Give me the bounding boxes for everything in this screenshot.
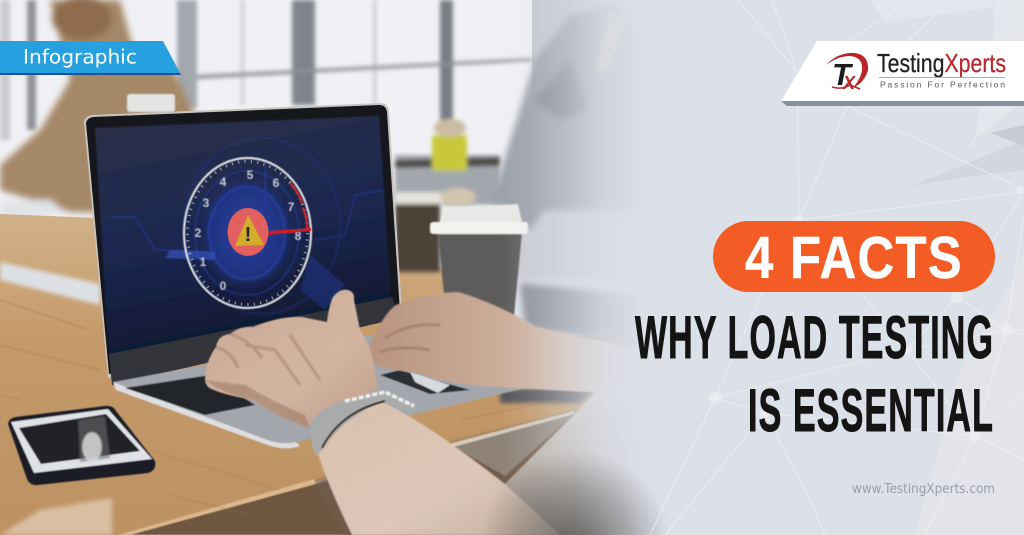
icon: warning triangle [235, 215, 264, 246]
gauge: numbers: 0 [220, 279, 227, 293]
logo mark: TX [826, 53, 868, 93]
gauge: numbers [195, 168, 302, 293]
photo: forearm [318, 402, 560, 535]
gauge: numbers: 1 [200, 255, 207, 269]
background network pattern [650, 0, 1024, 535]
logo wordmark: TestingXperts [877, 48, 1006, 78]
gauge: numbers: 5 [247, 168, 254, 182]
laptop lid and screen [84, 103, 402, 385]
gauge: needle [268, 228, 311, 235]
gauge: dial ring [184, 158, 311, 308]
laptop [84, 103, 530, 448]
gauge: glowing rings [110, 138, 385, 314]
photo: sleeve bottom shadow [489, 457, 664, 535]
laptop deck and keyboard [113, 335, 530, 448]
photo: laptop on desk [0, 0, 664, 535]
gauge: numbers: 4 [220, 175, 227, 189]
logo plate [781, 101, 1024, 106]
banner label: Infographic [23, 46, 137, 68]
icon: smartphone [8, 406, 155, 485]
photo: left hand [205, 290, 378, 428]
gauge [110, 138, 385, 314]
gauge: numbers: 8 [295, 229, 302, 243]
website url: www.TestingXperts.com [852, 482, 995, 497]
photo: right-side fade overlay [511, 0, 670, 535]
icon: wristwatch [310, 390, 416, 456]
icon: warning triangle: ! [245, 224, 251, 246]
icon: coffee cup behind [395, 188, 476, 272]
gauge: red zone [290, 183, 307, 229]
gauge: warning circle [228, 208, 268, 256]
logo mark: TX: X [842, 73, 856, 93]
photo: sleeve [504, 392, 633, 532]
logo: TestingXperts [781, 41, 1024, 106]
title [635, 304, 994, 444]
gauge: numbers: 7 [288, 200, 295, 214]
icon: coffee cup with lid [430, 204, 528, 316]
logo mark: TX: T [832, 57, 854, 92]
photo: wooden table [0, 214, 700, 535]
gauge: numbers: 6 [273, 176, 280, 190]
gauge: numbers: 2 [195, 226, 202, 240]
banner: Infographic tag [0, 41, 181, 75]
photo: person in grey top [494, 12, 602, 230]
logo tagline: Passion For Perfection [880, 80, 1005, 90]
photo: blurred window background [0, 0, 620, 280]
heading pill: 4 FACTS: 4 FACTS [745, 225, 963, 291]
gauge: numbers: 3 [203, 196, 210, 210]
photo: right hand [369, 292, 640, 395]
